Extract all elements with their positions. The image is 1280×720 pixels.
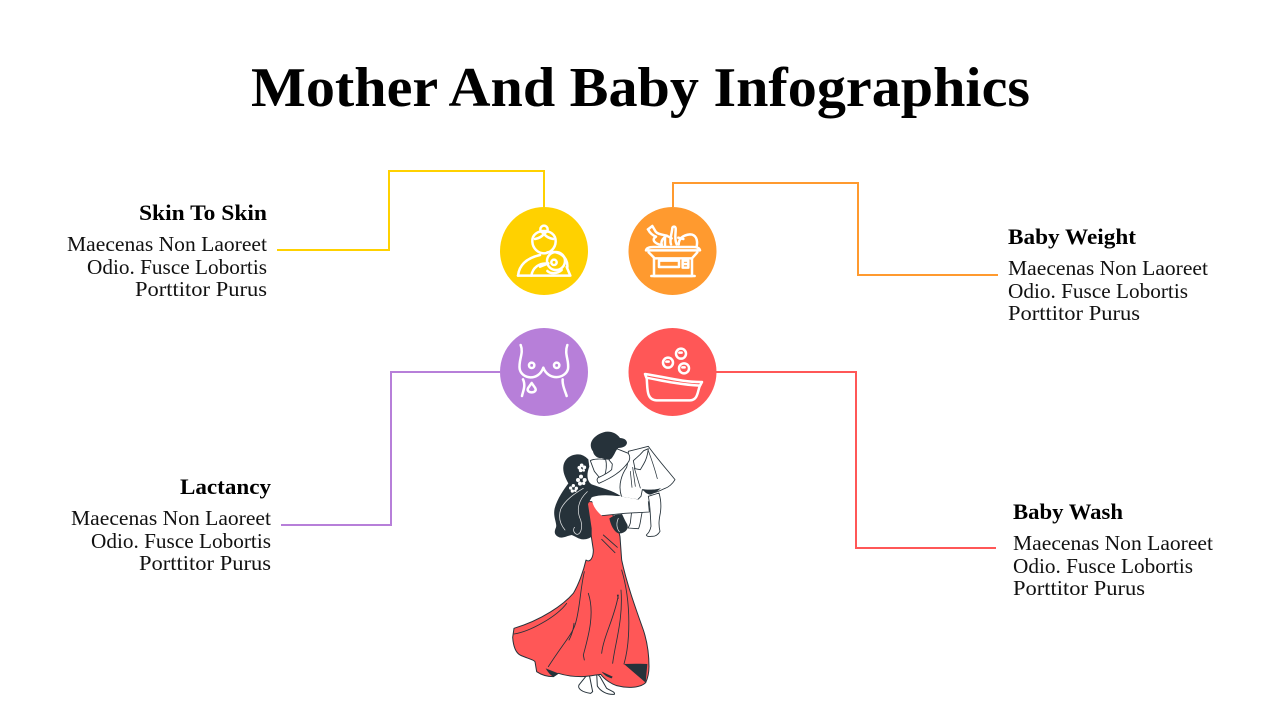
text block: baby weight: Maecenas Non Laoreet bbox=[1008, 256, 1208, 280]
dress bbox=[513, 502, 649, 687]
connector: lactancy bbox=[281, 372, 500, 525]
text block: baby weight bbox=[1008, 224, 1208, 325]
connector: baby weight bbox=[673, 183, 998, 275]
baby dress bbox=[620, 446, 675, 500]
mother hair bbox=[554, 454, 628, 539]
text block: baby wash: Baby Wash bbox=[1013, 499, 1123, 524]
mother face bbox=[590, 459, 606, 477]
text block: skin to skin: Maecenas Non Laoreet bbox=[67, 232, 267, 256]
text block: baby wash: Maecenas Non Laoreet bbox=[1013, 531, 1213, 555]
text block: lactancy: Lactancy bbox=[180, 474, 272, 499]
text block: skin to skin: Skin To Skin bbox=[139, 200, 268, 225]
icon: bath tub with bubbles, red circle bbox=[628, 328, 716, 416]
text block: baby weight: Odio. Fusce Lobortis bbox=[1008, 279, 1188, 303]
dress folds bbox=[514, 535, 629, 667]
text block: lactancy bbox=[71, 474, 272, 575]
text block: baby wash bbox=[1013, 499, 1213, 600]
text block: skin to skin: Porttitor Purus bbox=[135, 277, 267, 301]
title: Mother And Baby Infographics bbox=[251, 57, 1030, 119]
baby legs, mother arm, baby dress bbox=[590, 432, 675, 536]
baby shirt and arm bbox=[597, 449, 630, 483]
text block: baby weight: Baby Weight bbox=[1008, 224, 1137, 249]
icon: breasts with milk drop, purple circle bbox=[500, 328, 588, 416]
mother hand bbox=[633, 449, 648, 470]
flowers bbox=[569, 463, 587, 493]
mother arm bbox=[592, 495, 649, 516]
baby legs bbox=[646, 493, 661, 536]
mother feet bbox=[579, 673, 614, 694]
dress hem shadows bbox=[546, 664, 647, 683]
text block: baby wash: Odio. Fusce Lobortis bbox=[1013, 554, 1193, 578]
icon: baby on scale, orange circle bbox=[628, 207, 716, 295]
text block: baby weight: Porttitor Purus bbox=[1008, 301, 1140, 325]
illustration: mother lifting baby bbox=[513, 432, 675, 694]
icon: mother holding baby, yellow circle bbox=[500, 207, 588, 295]
connector: skin to skin bbox=[277, 171, 544, 250]
text block: skin to skin: Odio. Fusce Lobortis bbox=[87, 255, 267, 279]
text block: baby wash: Porttitor Purus bbox=[1013, 576, 1145, 600]
text block: lactancy: Odio. Fusce Lobortis bbox=[91, 529, 271, 553]
text block: skin to skin bbox=[67, 200, 268, 301]
connector: baby wash bbox=[716, 372, 996, 548]
text block: lactancy: Porttitor Purus bbox=[139, 551, 271, 575]
baby hair bbox=[591, 432, 627, 460]
text block: lactancy: Maecenas Non Laoreet bbox=[71, 506, 271, 530]
